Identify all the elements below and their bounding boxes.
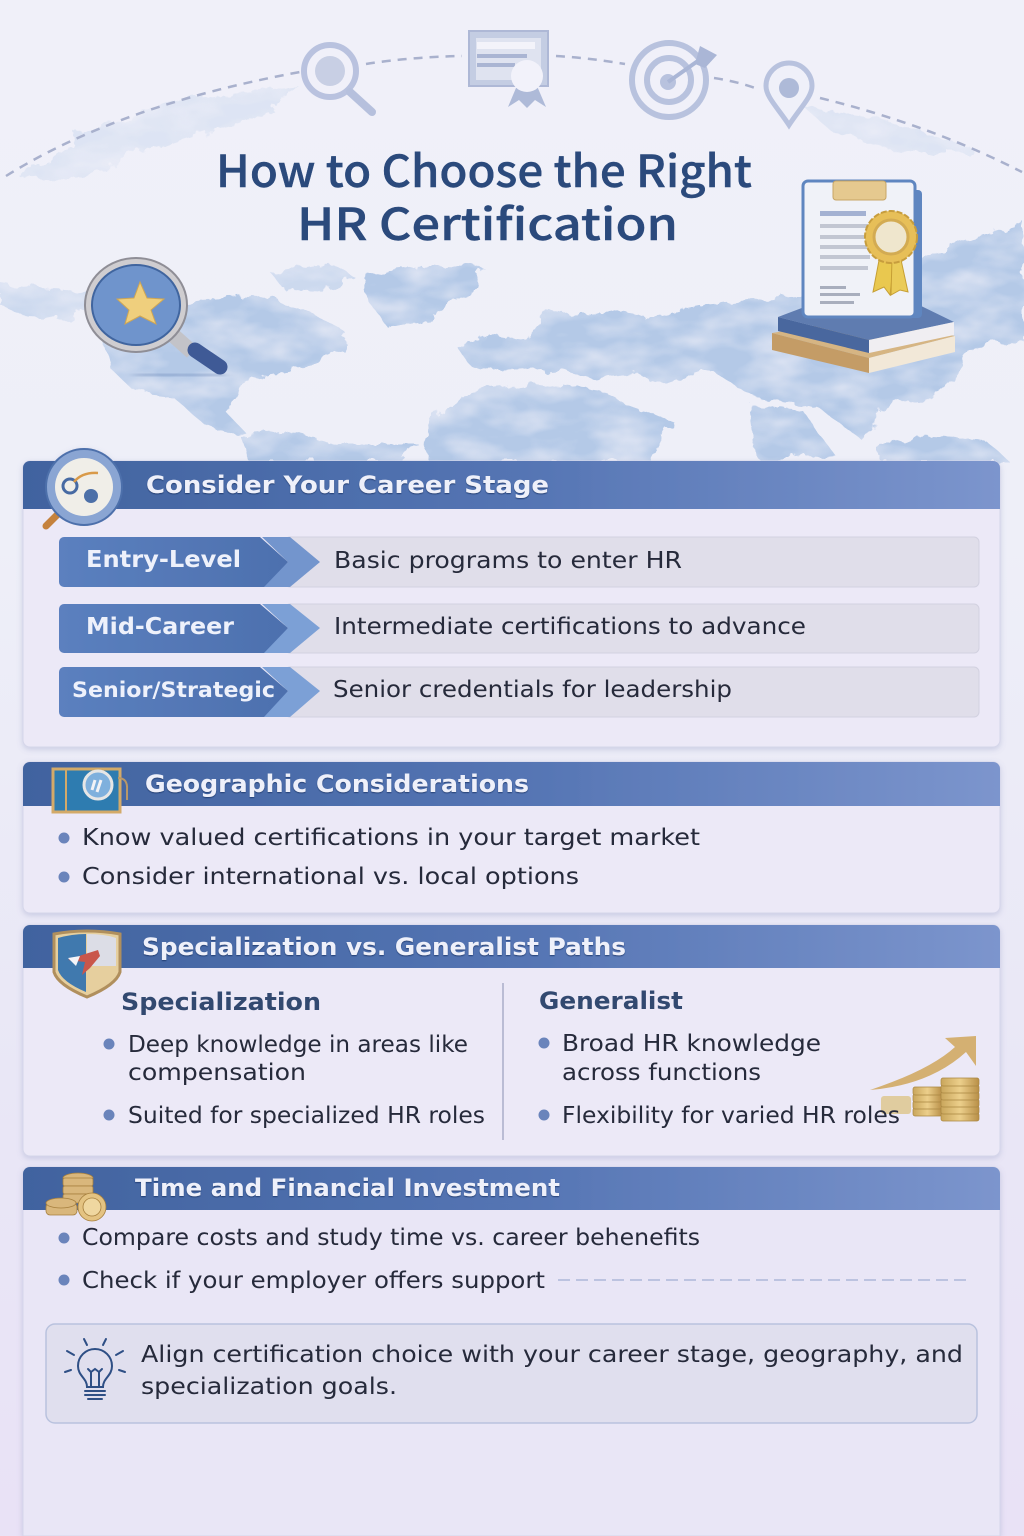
- column: generalist: Broad HR knowledge: [562, 1031, 821, 1057]
- panel header: [23, 762, 1000, 806]
- icon: coins with growth arrow: [870, 1036, 979, 1121]
- panel header: Time and Financial Investment: [135, 1174, 560, 1202]
- icon: outline magnifier: [304, 45, 372, 112]
- callout: takeaway: specialization goals.: [141, 1374, 397, 1400]
- icon: shield: [54, 931, 120, 997]
- bullet list: [58, 1225, 700, 1294]
- panel body: [23, 762, 1000, 913]
- title: How to Choose the Right: [216, 136, 752, 200]
- row: mid-career: Mid-Career: [86, 614, 235, 640]
- column: generalist: Flexibility for varied HR roles: [562, 1103, 900, 1129]
- icon: light bulb: [65, 1339, 125, 1399]
- title: HR Certification: [297, 189, 678, 253]
- bullet list: Consider international vs. local options: [82, 864, 579, 890]
- row: entry-level: [59, 537, 979, 587]
- column: specialization: Suited for specialized HR roles: [128, 1103, 485, 1129]
- row: mid-career: Intermediate certifications to advance: [334, 614, 806, 640]
- panel header: [23, 1167, 1000, 1210]
- world map: [0, 86, 1024, 462]
- dashed arc connecting icons: [6, 56, 1022, 176]
- icon: magnifier with star: [85, 258, 225, 376]
- icon: magnifier with tools: [46, 449, 122, 526]
- bullet list: Check if your employer offers support: [82, 1268, 545, 1294]
- panel header: Geographic Considerations: [145, 770, 529, 798]
- column: specialization: [104, 988, 485, 1129]
- row: entry-level: Basic programs to enter HR: [334, 548, 682, 574]
- lower tan book: [772, 318, 955, 373]
- column: generalist: Generalist: [539, 987, 683, 1015]
- panel: career stage: [23, 449, 1000, 747]
- panel header: [23, 925, 1000, 968]
- row: entry-level: Entry-Level: [86, 547, 241, 573]
- bullet list: Compare costs and study time vs. career behenefits: [82, 1225, 700, 1251]
- bullet list: Know valued certifications in your target market: [82, 825, 700, 851]
- row: mid-career: [59, 604, 979, 653]
- panel body: [23, 1167, 1000, 1536]
- panel: time and financial investment: [23, 1167, 1000, 1536]
- column: specialization: Deep knowledge in areas like: [128, 1032, 468, 1058]
- icon: map pin: [766, 63, 812, 125]
- title: [216, 136, 752, 253]
- upper blue book: [778, 303, 954, 353]
- panel header: Specialization vs. Generalist Paths: [142, 933, 626, 961]
- panel body: [23, 925, 1000, 1156]
- panel: specialization vs generalist: [23, 925, 1000, 1156]
- icon: outline certificate: [469, 31, 548, 108]
- row: senior/strategic: [59, 667, 979, 717]
- bullet list: [58, 825, 700, 890]
- column: generalist: across functions: [562, 1060, 761, 1086]
- callout: takeaway: Align certification choice with your career stage, geography, and: [141, 1342, 963, 1368]
- clipboard: [803, 181, 922, 318]
- panel header: [23, 461, 1000, 509]
- panel header: Consider Your Career Stage: [146, 471, 549, 499]
- callout: takeaway: [46, 1324, 977, 1423]
- row: senior/strategic: Senior/Strategic: [72, 678, 275, 702]
- row: senior/strategic: Senior credentials for leadership: [333, 677, 732, 703]
- icon: target with arrow: [632, 43, 717, 117]
- icon: certificate on books: [772, 181, 955, 373]
- icon: coin stacks: [46, 1173, 106, 1221]
- column: generalist: [538, 987, 900, 1129]
- column: specialization: Specialization: [121, 988, 321, 1016]
- column: specialization: compensation: [128, 1060, 306, 1086]
- panel body: [23, 461, 1000, 747]
- icon: map with magnifier: [53, 769, 127, 812]
- gold seal with ribbons: [865, 211, 917, 295]
- panel: geographic considerations: [23, 762, 1000, 913]
